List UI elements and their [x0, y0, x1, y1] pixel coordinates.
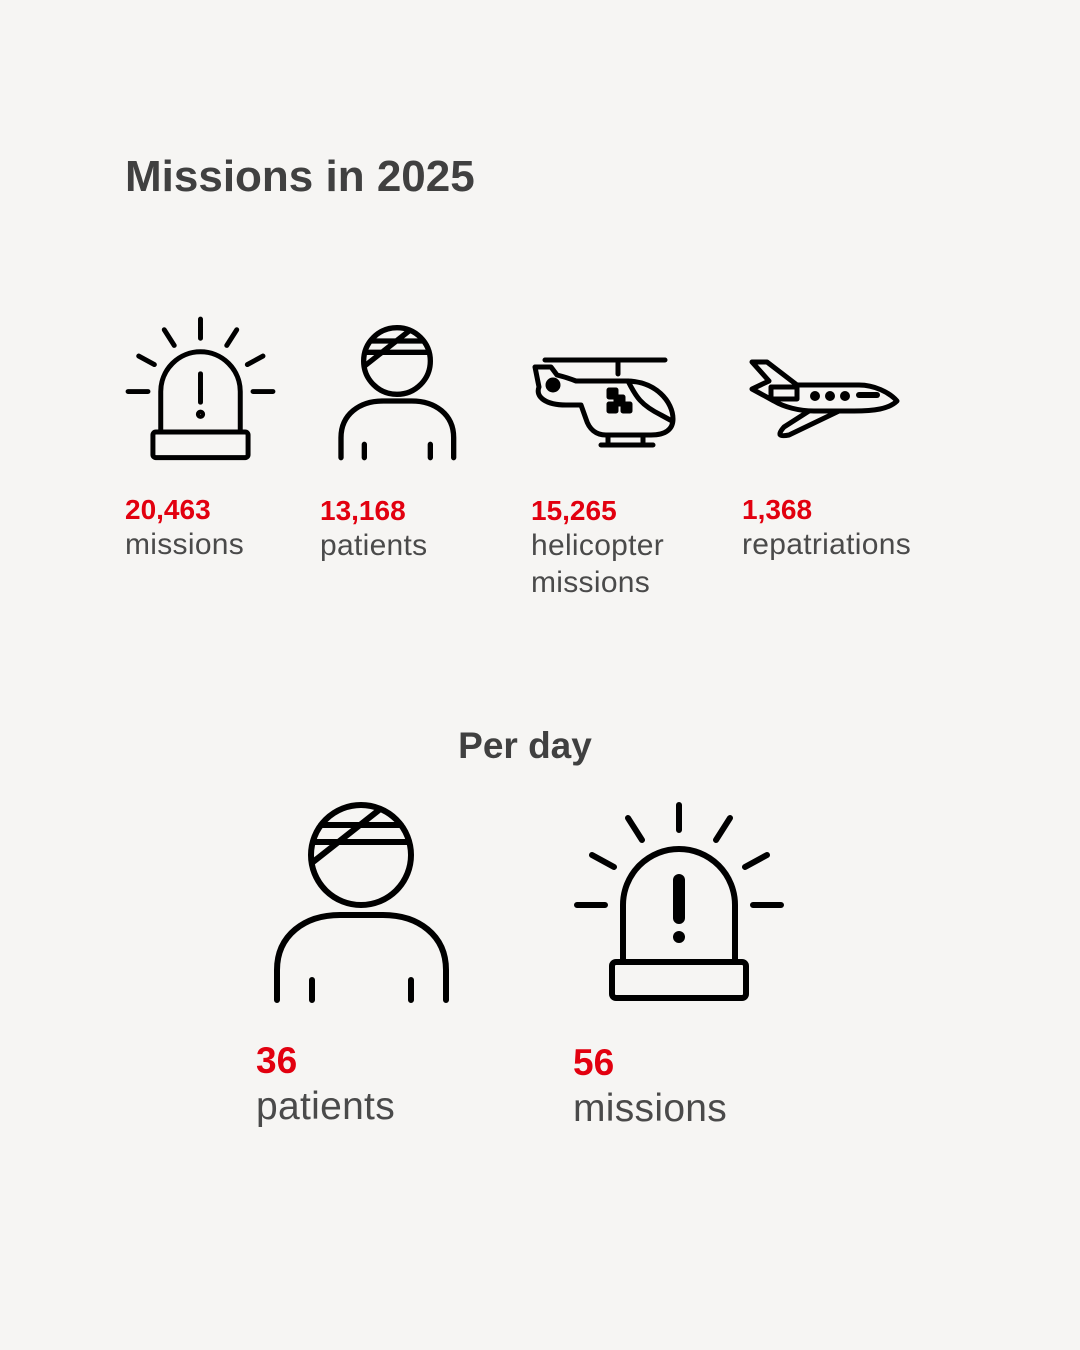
stat: missions per day: missions: [573, 1087, 727, 1130]
stat: patients: 13,168: [320, 495, 406, 526]
stat: patients per day: [256, 1040, 395, 1128]
heading: per day: Per day: [458, 725, 592, 766]
stat: helicopter missions: helicopter: [531, 529, 664, 562]
stat: helicopter missions: [531, 495, 664, 599]
icon: siren large: [574, 802, 784, 1001]
stat: patients per day: patients: [256, 1085, 395, 1128]
stat: missions: 20,463: [125, 494, 211, 525]
icon: plane: [750, 360, 900, 438]
stat: missions: missions: [125, 528, 244, 561]
stat: patients per day: 36: [256, 1040, 297, 1081]
stat: missions per day: [573, 1042, 727, 1130]
stat: repatriations: repatriations: [742, 528, 911, 561]
icon: siren small: [126, 316, 276, 460]
icon: helicopter: [532, 358, 676, 448]
icon: patient large: [274, 802, 449, 1003]
stat: missions per day: 56: [573, 1042, 614, 1083]
title: Missions in 2025: [125, 152, 475, 201]
stat: helicopter missions: 15,265: [531, 495, 617, 526]
icon: patient small: [338, 325, 456, 460]
stat: missions: [125, 494, 244, 561]
stat: repatriations: 1,368: [742, 494, 812, 525]
stat: patients: patients: [320, 529, 427, 562]
stat: repatriations: [742, 494, 911, 561]
stat: helicopter missions: missions: [531, 566, 650, 599]
stat: patients: [320, 495, 427, 562]
